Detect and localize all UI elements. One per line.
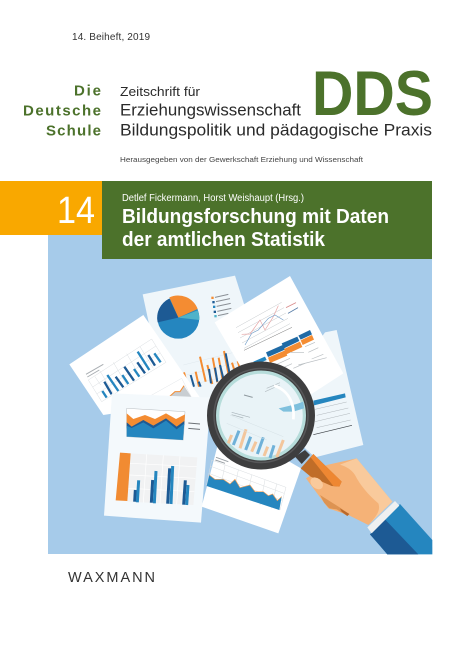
paper: pie chart [143, 276, 273, 422]
series name: Die Deutsche Schule: Schule [46, 122, 101, 140]
publisher note: Herausgegeben von der Gewerkschaft Erziehung und Wissenschaft [120, 155, 364, 164]
cuff [367, 501, 399, 533]
small step chart [151, 378, 192, 398]
illustration background [48, 235, 432, 554]
orange handle [301, 454, 342, 487]
paper: lower left charts [104, 393, 211, 523]
DDS logo: DDS [312, 59, 433, 129]
thumb [308, 475, 325, 492]
pricing table rows [272, 342, 327, 372]
journal subtitle [120, 84, 432, 140]
series name: Die Deutsche Schule: Die [74, 82, 101, 100]
area chart legend [188, 423, 200, 429]
sleeve [370, 504, 432, 554]
area [207, 475, 282, 510]
chart grid [88, 339, 166, 402]
magnifying glass [212, 366, 310, 465]
pricing table headers [253, 330, 314, 365]
column chart [116, 453, 197, 505]
line chart [236, 302, 292, 350]
lens highlight [274, 386, 294, 419]
lens [216, 370, 306, 460]
table rows [315, 402, 351, 428]
paper: table (right) [267, 330, 363, 457]
green title block: Bildungsforschung mit Daten [122, 206, 389, 228]
series name: Die Deutsche Schule: Deutsche [23, 102, 101, 120]
neck of the handle [295, 450, 310, 464]
paper: lower right area chart [202, 423, 301, 533]
table header [313, 393, 346, 405]
hand holding the handle [295, 450, 432, 554]
paired bar chart [183, 351, 247, 387]
green title block: der amtlichen Statistik [122, 229, 326, 251]
area chart [127, 408, 185, 440]
green title block [102, 181, 432, 259]
journal subtitle: Zeitschrift für [120, 84, 201, 99]
chart caption [86, 364, 103, 377]
line chart legend [286, 303, 298, 313]
caption [215, 457, 228, 463]
bars [102, 352, 161, 398]
issue line: 14. Beiheft, 2019 [72, 32, 150, 43]
paper: bar chart [69, 315, 202, 415]
pie chart [157, 295, 199, 339]
magnified content [227, 383, 304, 458]
orange number block [0, 181, 102, 235]
journal subtitle: Bildungspolitik und pädagogische Praxis [120, 122, 432, 140]
journal subtitle: Erziehungswissenschaft [120, 102, 301, 120]
series name: Die Deutsche Schule [23, 82, 101, 140]
pie legend [211, 294, 231, 317]
grid [207, 460, 286, 510]
publisher logo: WAXMANN [68, 570, 155, 586]
rim [212, 366, 310, 465]
palm [306, 458, 392, 525]
paper: line chart and table [215, 276, 343, 395]
orange number block: 14 [57, 190, 95, 232]
green title block: Detlef Fickermann, Horst Weishaupt (Hrsg.) [122, 193, 304, 204]
